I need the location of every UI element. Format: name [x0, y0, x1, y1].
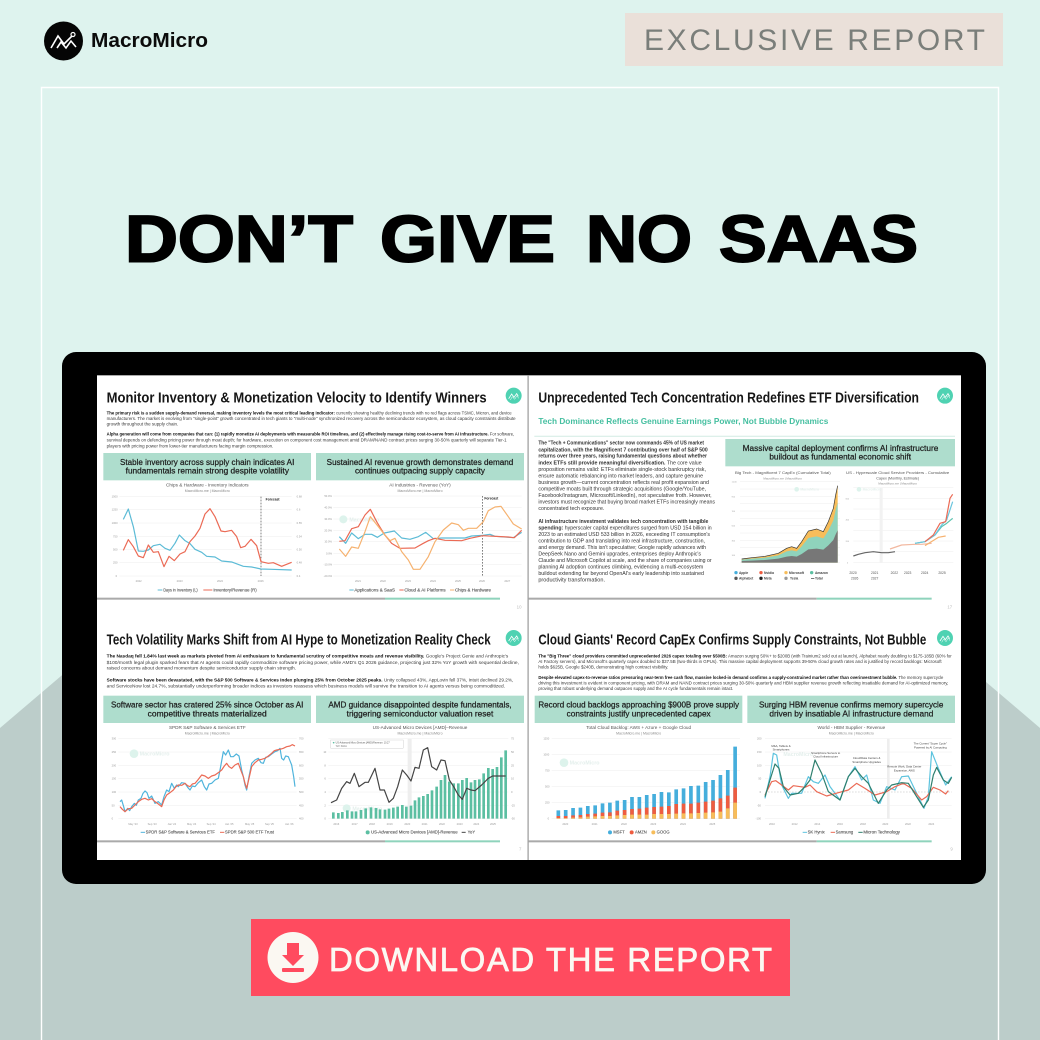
chart: HBM supplier revenue: Cloud Infrastructure	[813, 755, 839, 759]
chart: AMD revenue: 6	[324, 777, 326, 781]
chart: inventory indicators: 0.68	[297, 495, 302, 499]
chart: SPDR software ETF: MacroMicro	[140, 752, 170, 758]
chart: inventory indicators: 0.48	[297, 561, 302, 565]
slide body text: contribution to GDP and translating into real infrastructure, construction,	[538, 538, 705, 544]
banner: stable inventory: fundamentals remain strong despite volatility	[126, 466, 290, 476]
slide body text: returns over three years, raising fundamental questions about whether	[538, 454, 707, 460]
chart: AI industries revenue: 2026	[479, 579, 485, 583]
chart: SPDR software ETF: May '23	[128, 822, 138, 826]
slide body text: spending: hyperscaler capital expenditures surged from USD 154 billion in	[538, 525, 712, 531]
title: DON’T	[125, 202, 353, 276]
chart: AMD revenue: 10	[511, 777, 514, 781]
chart: AI industries revenue: -10.0%	[324, 563, 333, 567]
chart: SPDR software ETF: Sep '23	[148, 822, 157, 826]
chart: HBM supplier revenue: 50	[758, 777, 762, 781]
chart: cloud backlog: 250	[545, 801, 550, 805]
chart: SPDR software ETF: 250	[112, 750, 117, 754]
chart: inventory indicators: Forecast	[266, 498, 280, 502]
chart: SPDR software ETF: 450	[299, 803, 304, 807]
chart: cloud backlog: 750	[545, 769, 550, 773]
title: GIVE	[380, 202, 555, 276]
chart: HBM supplier revenue: 0	[760, 790, 762, 794]
chart: HBM supplier revenue	[756, 725, 952, 835]
slide body text: productivity transformation.	[538, 578, 605, 584]
slide body text: survival depends on defending pricing power through moat depth; for hardware, execution on component cost management amid DRAM/NAND contract prices surging 30-50% quarterly will separate Tier-1	[107, 438, 507, 443]
chart: inventory indicators: Chips & Hardware - Inventory Indicators	[166, 482, 249, 487]
chart: AMD revenue: 50	[511, 750, 514, 754]
slide icon	[937, 630, 953, 646]
chart: AI industries revenue: 2024	[430, 579, 436, 583]
chart: cloud backlog	[543, 725, 740, 835]
chart: HBM supplier revenue: M&A, Tablets &	[771, 744, 791, 748]
chart: AI industries revenue: 2023	[405, 579, 411, 583]
slide body text: holds $625B, Google $240B, demonstrating high contract visibility.	[538, 665, 668, 670]
logo: MacroMicro: MacroMicro	[91, 30, 208, 52]
chart: HBM supplier revenue: Smartphone Servers to	[811, 751, 841, 755]
chart: inventory indicators: Days in Inventory (L)	[163, 587, 198, 592]
slide heading: Monitor Inventory & Monetization Velocity to Identify Winners	[107, 390, 487, 407]
chart: magnificent 7 capex	[732, 471, 840, 581]
slide body text: planning AI adoption continues climbing, evidencing a multi-ecosystem	[538, 565, 703, 571]
slide body text: proving that robust underlying demand outpaces supply and the AI cycle fundamentals remain intact.	[538, 686, 733, 691]
slide body text: driving this investment is evident in component pricing, with DRAM and NAND contract prices surging 30-50% quarterly and HBM supplier revenue growth reflecting insatiable demand for AI-optimized memory,	[538, 681, 948, 686]
chart: inventory indicators: 2026	[258, 579, 264, 583]
panel: tech volatility slide	[97, 630, 524, 852]
chart: magnificent 7 capex: MacroMicro.me | MacroMicro	[763, 477, 802, 481]
chart: hyperscale capex: 400	[846, 520, 850, 522]
badge: exclusive report: EXCLUSIVE REPORT	[644, 24, 985, 57]
chart: AI industries revenue: 0.0%	[326, 551, 333, 555]
chart: AI industries revenue: MacroMicro	[349, 517, 380, 523]
chart: magnificent 7 capex: Alphabet	[739, 577, 754, 581]
slide body text: competitive moats built through strategic acquisitions (Google/YouTube,	[538, 486, 706, 492]
chart: hyperscale capex: 0	[847, 563, 849, 565]
chart: AI industries revenue: AI Industries - Revenue (YoY)	[389, 482, 451, 487]
chart: cloud backlog: 1250	[543, 737, 550, 741]
slide icon	[506, 630, 522, 646]
chart: cloud backlog: 0	[548, 817, 550, 821]
chart: magnificent 7 capex: 100	[732, 555, 736, 557]
chart: HBM supplier revenue: MacroMicro.me | MacroMicro	[829, 732, 874, 736]
chart: hyperscale capex: MacroMicro	[863, 488, 881, 492]
chart: HBM supplier revenue: World - HBM Supplier - Revenue	[817, 725, 886, 730]
title: SAAS	[719, 202, 918, 276]
banner: HBM revenue	[747, 696, 955, 723]
chart: SPDR software ETF: May '25	[245, 822, 255, 826]
banner: sustained revenue	[316, 453, 524, 480]
progress bar	[97, 840, 500, 842]
banner: AMD guidance: AMD guidance disappointed despite fundamentals,	[328, 700, 512, 710]
chart: magnificent 7 capex: Amazon	[815, 571, 828, 575]
chart: SPDR software ETF: Sep '25	[265, 822, 274, 826]
slide body text: buildout extending far beyond OpenAI's early leadership into sustained	[538, 571, 704, 577]
banner: AMD guidance: triggering semiconductor valuation reset	[347, 708, 494, 718]
slide body text: The "Big Three" cloud providers committed unprecedented 2026 capex totaling over $500B: Amazon surging 50%+ to $200B (with Trainium2 sold out at launch), Alphabet nearly doubling to $175-185B (60% for	[538, 653, 952, 658]
slide body text: proposition remains valid: ETFs eliminate single-stock bankruptcy risk,	[538, 467, 706, 473]
slide body text: manufacturers. The market is evolving from "single-point" growth concentrated in tech giants to "multi-node" synchronized recovery across the semiconductor ecosystem, as cloud capacity constraints distribute	[107, 416, 516, 421]
banner: software sector: Software sector has cratered 25% since October as AI	[111, 700, 303, 710]
chart: hyperscale capex: 2022	[891, 571, 898, 575]
chart: cloud backlog: 1000	[543, 753, 550, 757]
chart: AMD revenue: 0	[511, 790, 513, 794]
chart: HBM supplier revenue: The Current "Super Cycle"	[914, 742, 947, 746]
chart: magnificent 7 capex: Tesla	[790, 577, 798, 581]
chart: hyperscale capex: MacroMicro.me | MacroMicro	[878, 482, 917, 486]
chart: hyperscale capex: 2024	[921, 571, 929, 575]
chart: cloud backlog: 2021	[592, 822, 598, 826]
panel: tech concentration slide	[528, 388, 955, 609]
badge: exclusive report	[625, 13, 1003, 66]
chart: SPDR software ETF: 0	[112, 817, 114, 821]
chart: AMD revenue: 2	[324, 803, 326, 807]
banner: HBM revenue: driven by insatiable AI infrastructure demand	[769, 708, 934, 718]
chart: AMD revenue: US-Advanced Micro Devices [AMD]-Revenue	[371, 830, 458, 835]
panel: cloud capex slide	[528, 630, 955, 852]
slide body text: AI infrastructure investment validates tech concentration with tangible	[538, 519, 708, 525]
chart: SPDR software ETF: SPDR S&P Software & Services ETF	[169, 725, 246, 730]
slide body text: The "Tech + Communications" sector now commands 45% of US market	[538, 441, 704, 447]
chart: AMD revenue: YoY: 34.11	[336, 746, 347, 748]
chart: AI industries revenue: Cloud & AI Platforms	[404, 587, 446, 592]
slide body text	[107, 653, 519, 689]
slide heading: Cloud Giants' Record CapEx Confirms Supply Constraints, Not Bubble	[538, 632, 926, 649]
chart: AMD revenue: 8	[324, 763, 326, 767]
banner: cloud backlogs	[535, 696, 742, 723]
chart: magnificent 7 capex: Apple	[739, 571, 748, 575]
slide body text: Despite elevated capex-to-revenue ratios pressuring near-term free cash flow, massive locked-in demand confirms a supply-constrained market rather than overinvestment bubble. The memory supercycle	[538, 675, 944, 680]
chart: AI industries revenue: 40.0%	[324, 505, 333, 509]
chart: HBM supplier revenue: SK Hynix	[808, 830, 826, 835]
chart: hyperscale capex	[846, 471, 953, 581]
slide body text: Facebook/Instagram, Microsoft/LinkedIn), not speculative froth. However,	[538, 493, 712, 499]
chart: hyperscale capex: 2027	[871, 577, 879, 581]
chart: HBM supplier revenue: 200	[757, 737, 762, 741]
chart: magnificent 7 capex: 900	[732, 496, 736, 498]
chart: magnificent 7 capex: MacroMicro	[800, 488, 819, 492]
chart: AMD revenue: 2019	[387, 822, 393, 826]
slide body text: concentrated tech exposure.	[538, 506, 604, 512]
chart: inventory indicators: 0.50	[297, 547, 302, 551]
chart: inventory indicators: 0.55	[297, 521, 302, 525]
chart: cloud backlog: 2020	[562, 822, 569, 826]
chart: inventory indicators: 0.6	[297, 508, 301, 512]
chart: hyperscale capex: Capex (Monthly, Estimate)	[876, 476, 919, 480]
chart: SPDR software ETF: 150	[112, 777, 117, 781]
banner: sustained revenue: Sustained AI revenue growth demonstrates demand	[327, 457, 514, 467]
chart: AMD revenue: 2025	[490, 822, 496, 826]
chart: SPDR software ETF	[112, 725, 304, 835]
title	[125, 202, 918, 276]
chart: HBM supplier revenue: 100	[757, 763, 762, 767]
chart: HBM supplier revenue: Cloud/Data Centers &	[853, 756, 881, 760]
slide body text: players with pricing power from lower-tier manufacturers facing margin compression.	[107, 443, 273, 448]
chart: AI industries revenue: 10.0%	[324, 540, 333, 544]
chart: HBM supplier revenue: 2016	[837, 822, 843, 826]
chart: magnificent 7 capex: Microsoft	[789, 571, 805, 575]
chart: hyperscale capex: 2021	[871, 571, 879, 575]
chart: HBM supplier revenue: Samsung	[836, 830, 854, 835]
chart: magnificent 7 capex: 1,100	[732, 482, 738, 484]
chart: inventory indicators: MacroMicro.me | MacroMicro	[185, 489, 230, 493]
chart: inventory indicators: 1500	[112, 495, 118, 499]
chart: cloud backlog: 500	[545, 785, 550, 789]
chart: AI industries revenue: 50.0%	[324, 494, 333, 498]
chart: HBM supplier revenue: 2020	[882, 822, 889, 826]
chart: SPDR software ETF: 400	[299, 817, 304, 821]
chart: HBM supplier revenue: Remote Work, Data Center	[887, 765, 921, 769]
chart: magnificent 7 capex: Total	[815, 577, 823, 581]
chart: HBM supplier revenue: 2022	[905, 822, 911, 826]
banner: stable inventory	[103, 453, 311, 480]
slide body text: Software stocks have been devastated, with the S&P 500 Software & Services Index plunging 25% from October 2025 peaks. Unity collapsed 43%, AppLovin fell 37%, Intuit declined 29.2%,	[107, 677, 513, 682]
background: lower chevron shape	[0, 360, 1040, 1040]
slide body text: business growth—current concentration reflects real profit expansion and	[538, 480, 709, 486]
slide icon	[506, 388, 522, 404]
chart: SPDR software ETF: 50	[112, 803, 115, 807]
chart: AMD revenue: 0	[324, 817, 326, 821]
chart: hyperscale capex: 600	[846, 498, 850, 500]
chart: inventory indicators: Inventory/Revenue (R)	[213, 587, 257, 592]
slide body text	[538, 653, 952, 691]
chart: cloud backlog: 2023	[650, 822, 657, 826]
page number: 10	[517, 604, 522, 609]
banner: cloud backlogs: Record cloud backlogs approaching $900B prove supply	[538, 700, 740, 710]
chart: SPDR software ETF: 700	[299, 737, 304, 741]
chart: SPDR software ETF: May '24	[187, 822, 197, 826]
chart: inventory indicators: 0	[116, 574, 118, 578]
chart: SPDR software ETF: 650	[299, 750, 304, 754]
chart: AMD revenue: 25	[511, 763, 514, 767]
chart: SPDR software ETF: MacroMicro.me | MacroMicro	[185, 732, 230, 736]
slide body text: AI Factory servers), and Microsoft's quarterly capex doubled to $37.5B (two-thirds in GPUs). This massive capital deployment supports 39-50% cloud growth rates and is justified by record backlogs: Microsoft	[538, 659, 942, 664]
chart: AMD revenue: 2020	[404, 822, 411, 826]
chart: inventory indicators: 500	[113, 547, 118, 551]
chart: cloud backlog: 2025	[709, 822, 716, 826]
chart: hyperscale capex: 2023	[904, 571, 912, 575]
chart: inventory indicators: 1000	[112, 521, 118, 525]
chart: HBM supplier revenue: Smartphones	[773, 748, 790, 752]
chart: AI industries revenue: 30.0%	[324, 517, 333, 521]
chart: cloud backlog: Total Cloud Backlog: AWS + Azure + Google Cloud	[586, 725, 692, 730]
chart: AI industries revenue: Forecast	[484, 497, 499, 501]
chart: HBM supplier revenue: -50	[757, 803, 761, 807]
banner: stable inventory: Stable inventory across supply chain indicates AI	[120, 457, 294, 467]
chart: AI industries revenue: 2025	[455, 579, 461, 583]
banner: capital deployment	[725, 439, 955, 466]
chart: AMD revenue: 4	[324, 790, 326, 794]
chart: inventory indicators: 0.4	[297, 574, 301, 578]
chart: cloud backlog: AMZN	[635, 830, 647, 835]
chart: SPDR software ETF: Jan '26	[285, 822, 294, 826]
chart: inventory indicators	[112, 482, 302, 592]
chart: AI industries revenue: 2022	[380, 579, 386, 583]
slide body text: DeepSeek Nano and Gemini upgrades, enterprises deploy Anthropic's	[538, 552, 701, 558]
chart: hyperscale capex: US - Hyperscale Cloud Service Providers - Cumulative	[846, 471, 949, 475]
chart: inventory indicators: 2023	[177, 579, 183, 583]
chart: SPDR software ETF: Jan '25	[225, 822, 234, 826]
chart: AMD revenue: 2022	[439, 822, 445, 826]
slide body text: ensure automatic rebalancing into market leaders, and capture genuine	[538, 473, 703, 479]
banner: capital deployment: buildout as fundamental economic shift	[769, 452, 912, 462]
chart: SPDR software ETF: Jan '24	[168, 822, 177, 826]
chart: inventory indicators: 1250	[112, 508, 118, 512]
chart: AMD revenue: US-Advanced Micro Devices [AMD]-Revenue: 10.27	[336, 742, 390, 745]
progress bar	[528, 598, 932, 600]
page number: 7	[519, 847, 522, 852]
chart: cloud backlog: MacroMicro	[570, 761, 600, 767]
slide body text: investors must recognize that buying broad market ETFs increasingly means	[538, 499, 715, 505]
chart: SPDR software ETF: 200	[112, 763, 117, 767]
chart: magnificent 7 capex: Big Tech - Magnificent 7 CapEx (Cumulative Total)	[735, 471, 831, 475]
banner: AMD guidance	[316, 696, 524, 723]
chart: inventory indicators: 750	[113, 534, 118, 538]
slide heading: Unprecedented Tech Concentration Redefines ETF Diversification	[538, 390, 919, 407]
chart: AMD revenue: 2018	[369, 822, 375, 826]
progress bar	[97, 598, 500, 600]
monitor	[62, 352, 986, 884]
chart: SPDR software ETF: 550	[299, 777, 304, 781]
slide body text: $100/month legal plugin sparked fears that AI agents could rapidly commoditize software pricing power, while AMD's Q1 2026 guidance, projecting just 32% YoY growth with sequential decline,	[107, 660, 519, 665]
banner: cloud backlogs: constraints justify unprecedented capex	[567, 708, 711, 718]
icon: download	[268, 932, 318, 983]
title: NO	[586, 202, 692, 276]
chart: AMD revenue: 2016	[333, 822, 340, 826]
slide body text	[538, 441, 715, 584]
chart: AMD revenue: -50	[511, 817, 515, 821]
chart: AMD revenue: -25	[511, 803, 515, 807]
chart: AI industries revenue: Chips & Hardware	[455, 587, 492, 592]
chart: HBM supplier revenue: Micron Technology	[863, 830, 901, 835]
chart: SPDR software ETF: SPDR S&P Software & Services ETF	[146, 830, 215, 835]
chart: AMD revenue: 10	[323, 750, 327, 754]
chart: cloud backlog: 2022	[621, 822, 627, 826]
slide body text: and energy demand. This isn't speculative; Google rapidly advances with	[538, 545, 706, 551]
slide body text: growth throughout the supply chain.	[107, 422, 178, 427]
chart: AI industries revenue	[324, 482, 522, 592]
chart: SPDR software ETF: 600	[299, 763, 304, 767]
chart: HBM supplier revenue: 2010	[769, 822, 775, 826]
chart: AMD revenue: MacroMicro.me | MacroMicro	[397, 732, 443, 736]
chart: AMD revenue: 75	[511, 737, 514, 741]
chart: AI industries revenue: 2027	[504, 579, 511, 583]
slide body text: Alpha generation will come from companies that can: (1) rapidly monetize AI deployments with measurable ROI timelines, and (2) effectively manage rising cost-to-serve from AI infrastructure. For software,	[107, 432, 514, 437]
slide heading: Tech Volatility Marks Shift from AI Hype to Monetization Reality Check	[107, 632, 491, 649]
chart: SPDR software ETF: SPDR S&P 500 ETF Trust	[225, 830, 275, 835]
slide body text: capitalization, with the Magnificent 7 contributing over half of S&P 500	[538, 447, 708, 453]
chart: inventory indicators: 2024	[217, 579, 223, 583]
chart: AMD revenue: YoY	[468, 830, 475, 835]
chart: HBM supplier revenue: -100	[756, 817, 762, 821]
chart: SPDR software ETF: 100	[112, 790, 117, 794]
slide body text: The primary risk is a sudden supply-demand reversal, making inventory levels the most critical leading indicator: currently showing healthy declining trends with no red flags across TSMC, Micron, and device	[107, 411, 512, 416]
chart: hyperscale capex: 2020	[849, 571, 857, 575]
chart: AMD revenue: US-Advanced Micro Devices [AMD]–Revenue	[373, 725, 468, 730]
chart: AMD revenue: 2021	[422, 822, 428, 826]
chart: magnificent 7 capex: 500	[732, 526, 736, 528]
chart: HBM supplier revenue: Powered by AI Computing	[914, 746, 947, 750]
chart: magnificent 7 capex: Nvidia	[764, 571, 774, 575]
chart: cloud backlog: 2024	[680, 822, 686, 826]
chart: AI industries revenue: Applications & SaaS	[354, 587, 395, 592]
button: download the report: DOWNLOAD THE REPORT	[329, 941, 772, 978]
progress bar	[528, 840, 932, 842]
chart: hyperscale capex: 2026	[851, 577, 859, 581]
chart: HBM supplier revenue: Expansion, AWS	[894, 769, 915, 773]
banner: software sector	[103, 696, 311, 723]
chart: inventory indicators: 0.54	[297, 534, 302, 538]
chart: AI industries revenue: 2021	[355, 579, 361, 583]
chart: AI industries revenue: -20.0%	[324, 574, 333, 578]
chart: SPDR software ETF: 500	[299, 790, 304, 794]
chart: cloud backlog: MacroMicro.me | MacroMicro	[616, 732, 661, 736]
chart: AMD revenue: 2024	[473, 822, 480, 826]
chart: hyperscale capex: 200	[846, 541, 850, 543]
logo: MacroMicro	[44, 22, 208, 60]
page number: 17	[947, 604, 953, 609]
chart: HBM supplier revenue: 2014	[814, 822, 821, 826]
chart: inventory indicators: 2022	[136, 579, 142, 583]
banner: sustained revenue: continues outpacing supply capacity	[355, 466, 486, 476]
banner: software sector: competitive threats materialized	[148, 708, 267, 718]
banner: capital deployment: Massive capital deployment confirms AI infrastructure	[743, 443, 939, 453]
chart: magnificent 7 capex: 300	[732, 540, 736, 542]
chart: AMD revenue: 2023	[457, 822, 463, 826]
chart: SPDR software ETF: 300	[112, 737, 117, 741]
chart: magnificent 7 capex: Meta	[764, 577, 772, 581]
slide body text: Claude and Microsoft Copilot at scale, and the share of companies using or	[538, 558, 712, 564]
chart: AMD revenue: 2017	[352, 822, 358, 826]
chart: HBM supplier revenue: 2012	[792, 822, 798, 826]
chart: cloud backlog: MSFT	[613, 830, 625, 835]
chart: AI industries revenue: MacroMicro.me | MacroMicro	[397, 489, 443, 493]
chart: SPDR software ETF: Sep '24	[207, 822, 216, 826]
slide body text	[107, 411, 516, 448]
slide body text: The Nasdaq fell 1.84% last week as markets pivoted from AI enthusiasm to fundamental scrutiny of competitive moats and revenue visibility. Google's Project Genie and Anthropic's	[107, 653, 508, 658]
chart: AMD revenue: MacroMicro	[352, 806, 383, 812]
chart: cloud backlog: GOOG	[657, 830, 670, 835]
chart: inventory indicators: 250	[113, 561, 118, 565]
chart: hyperscale capex: 2025	[938, 571, 946, 575]
button: download the report	[251, 919, 790, 996]
slide icon	[937, 388, 953, 404]
chart: HBM supplier revenue: 150	[757, 750, 762, 754]
chart: AMD revenue	[323, 725, 515, 835]
chart: HBM supplier revenue: MacroMicro	[783, 752, 814, 758]
page number: 9	[950, 847, 953, 852]
chart: HBM supplier revenue: Smartphone Upgrades	[852, 760, 881, 764]
subheading: Tech Dominance Reflects Genuine Earnings Power, Not Bubble Dynamics	[538, 416, 829, 426]
chart: AI industries revenue: 20.0%	[324, 528, 333, 532]
slide body text: and ServiceNow lost 24.7%, substantially underperforming broader indices as investors reassess which business models will survive the transition to AI agents versus being commoditized.	[107, 684, 505, 689]
chart: magnificent 7 capex: 700	[732, 511, 736, 513]
slide body text: 2023 to an estimated USD 533 billion in 2026, exceeding IT consumption's	[538, 532, 710, 538]
panel: monitor inventory slide	[97, 388, 524, 609]
slide body text: raised concerns about demand momentum despite semiconductor supply chain strength.	[107, 666, 296, 671]
chart: HBM supplier revenue: 2018	[860, 822, 866, 826]
banner: HBM revenue: Surging HBM revenue confirms memory supercycle	[759, 700, 944, 710]
slide body text: index ETFs still provide meaningful diversification. The core value	[538, 460, 702, 466]
chart: HBM supplier revenue: 2024	[928, 822, 935, 826]
